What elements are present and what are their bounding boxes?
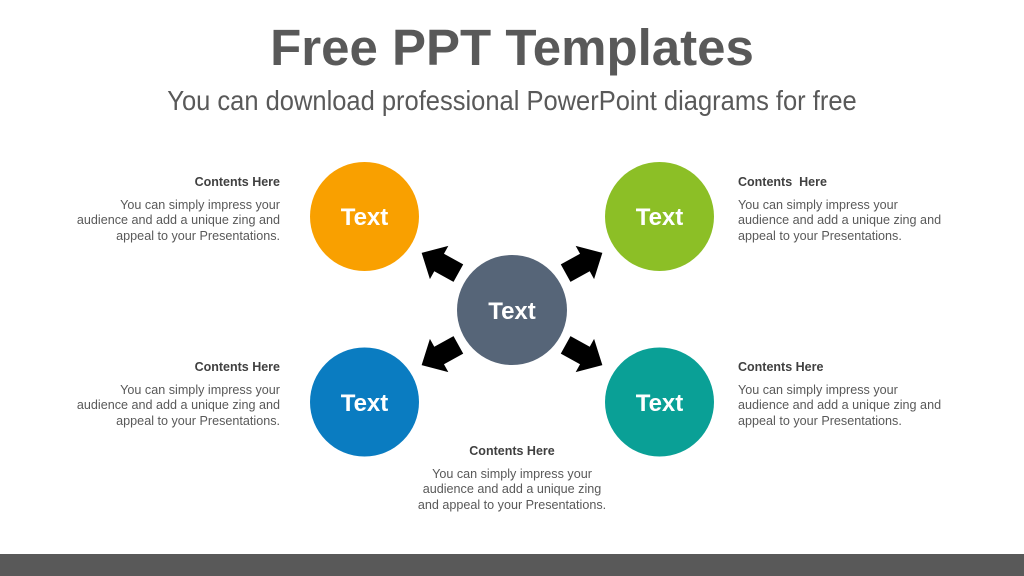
text block: bottom-left: Contents Here <box>195 360 280 374</box>
text block: bottom-left <box>77 360 280 428</box>
text block: top-left: Contents Here <box>195 175 280 189</box>
circle: orange: Text <box>341 204 388 231</box>
text block: top-left <box>77 175 280 242</box>
text block: top-right: You can simply impress your <box>738 198 898 212</box>
text block: bottom-right: Contents Here <box>738 360 823 374</box>
text block: bottom-right: You can simply impress your <box>738 382 898 396</box>
text block: bottom-center: audience and add a unique zing <box>423 482 601 496</box>
text block: bottom-center: and appeal to your Presentations. <box>418 498 606 512</box>
text block: top-right: audience and add a unique zing and <box>738 213 941 227</box>
arrow: down-left <box>412 328 468 382</box>
footer bar <box>0 554 1024 576</box>
circle: teal <box>605 348 714 456</box>
circle: blue: Text <box>341 390 388 417</box>
text block: bottom-left: You can simply impress your <box>120 382 280 396</box>
circle: center: Text <box>488 298 536 325</box>
text block: top-left: audience and add a unique zing and <box>77 213 280 227</box>
text block: top-left: appeal to your Presentations. <box>116 228 280 242</box>
circle: green: Text <box>636 204 683 231</box>
text block: bottom-right <box>738 360 941 428</box>
circle: teal: Text <box>636 390 683 417</box>
circle: blue <box>310 348 419 456</box>
text block: bottom-center: Contents Here <box>469 444 555 458</box>
text block: top-right <box>738 175 941 242</box>
title: Free PPT Templates <box>270 19 754 76</box>
text block: bottom-center: You can simply impress your <box>432 466 592 480</box>
text block: bottom-right: appeal to your Presentations. <box>738 414 902 428</box>
subtitle: You can download professional PowerPoint diagrams for free <box>167 86 857 116</box>
text block: top-left: You can simply impress your <box>120 198 280 212</box>
arrow: up-left <box>412 236 468 290</box>
text block: top-right: appeal to your Presentations. <box>738 228 902 242</box>
circle: green <box>605 162 714 271</box>
text block: bottom-left: appeal to your Presentations. <box>116 414 280 428</box>
text block: bottom-right: audience and add a unique zing and <box>738 398 941 412</box>
arrow: down-right <box>556 328 612 382</box>
text block: top-right: Contents Here <box>738 175 827 189</box>
circle: center <box>457 255 567 365</box>
text block: bottom-center <box>418 444 606 512</box>
text block: bottom-left: audience and add a unique zing and <box>77 398 280 412</box>
circle: orange <box>310 162 419 271</box>
arrow: up-right <box>556 236 612 290</box>
